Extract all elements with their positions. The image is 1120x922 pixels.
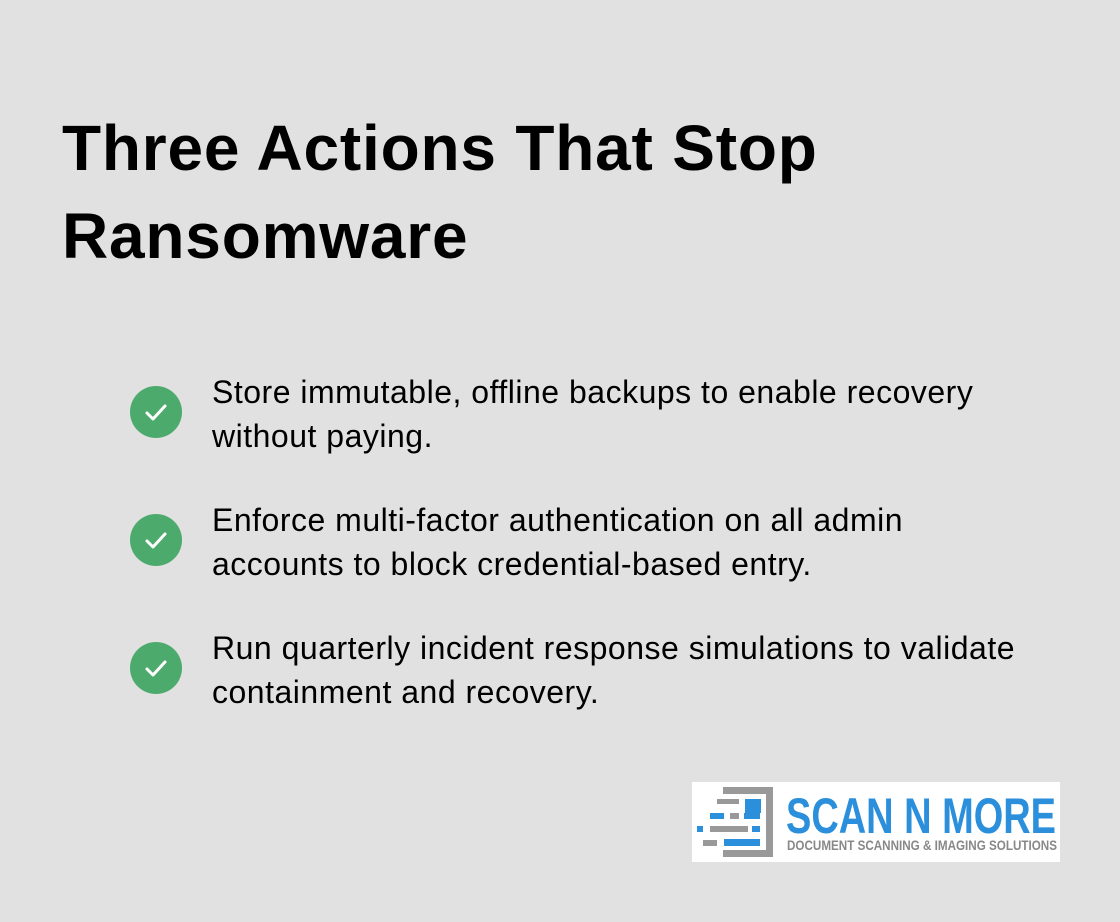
item 2 bbox=[130, 502, 903, 582]
title: Ransomware bbox=[62, 200, 468, 272]
title bbox=[62, 112, 818, 272]
text 3: Run quarterly incident response simulations to validate containment and recovery. bbox=[212, 630, 1015, 710]
text 2: accounts to block credential-based entry. bbox=[212, 546, 812, 582]
text 2: Enforce multi-factor authentication on all admin bbox=[212, 502, 903, 538]
text 2 bbox=[212, 502, 903, 582]
icon: check bbox=[130, 386, 182, 438]
icon: check bbox=[130, 514, 182, 566]
item 3 bbox=[130, 630, 1015, 710]
title: Three Actions That Stop bbox=[62, 112, 818, 184]
text 1: Store immutable, offline backups to enable recovery without paying. bbox=[212, 374, 973, 454]
logo bbox=[692, 782, 1060, 862]
item 1 bbox=[130, 374, 973, 454]
icon: check bbox=[130, 642, 182, 694]
